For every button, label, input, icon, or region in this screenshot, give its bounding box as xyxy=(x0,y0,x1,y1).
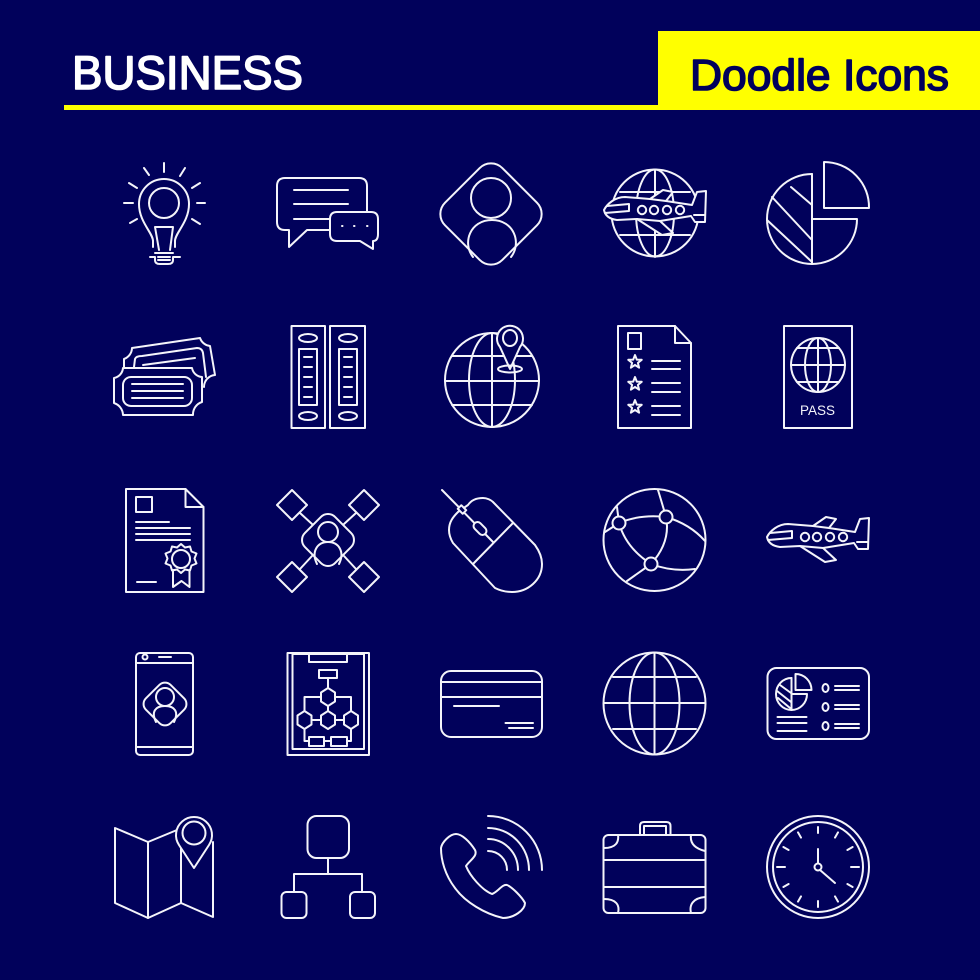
icon: computer mouse xyxy=(442,490,542,592)
icon: certificate document xyxy=(126,489,204,592)
icon: wall clock xyxy=(767,816,869,918)
icon: document with star ratings xyxy=(618,326,691,428)
icon: pie chart xyxy=(767,162,869,264)
icon: briefcase xyxy=(604,822,706,913)
yellow title banner xyxy=(658,31,980,110)
yellow header underline xyxy=(64,105,664,110)
icon: smartphone with user xyxy=(136,653,193,755)
icon: passport xyxy=(784,326,852,428)
icon: globe with location pin xyxy=(445,326,539,427)
icon: binders xyxy=(292,326,365,428)
icon: connected globe xyxy=(604,489,706,591)
icon: phone with signal xyxy=(441,816,542,918)
icon: globe with plane xyxy=(604,170,706,257)
icon: user network xyxy=(277,490,379,592)
icon: credit card xyxy=(441,671,542,737)
icon: organization chart xyxy=(282,816,375,918)
icon: light bulb xyxy=(124,163,205,264)
icon: info card with pie chart xyxy=(768,668,869,739)
icon: map with pin xyxy=(115,817,213,918)
icon: chat bubbles xyxy=(277,178,378,249)
icon: user diamond xyxy=(434,157,548,271)
icon: passport: PASS xyxy=(800,402,835,418)
icon: world globe xyxy=(604,652,706,754)
icon: tickets xyxy=(114,338,215,415)
icon: airplane xyxy=(767,517,869,562)
title: Business: BUSINESS xyxy=(72,46,303,99)
heading: Doodle Icons: Doodle Icons xyxy=(690,51,949,100)
icon: clipboard flowchart xyxy=(288,653,369,755)
icon grid xyxy=(114,157,869,918)
